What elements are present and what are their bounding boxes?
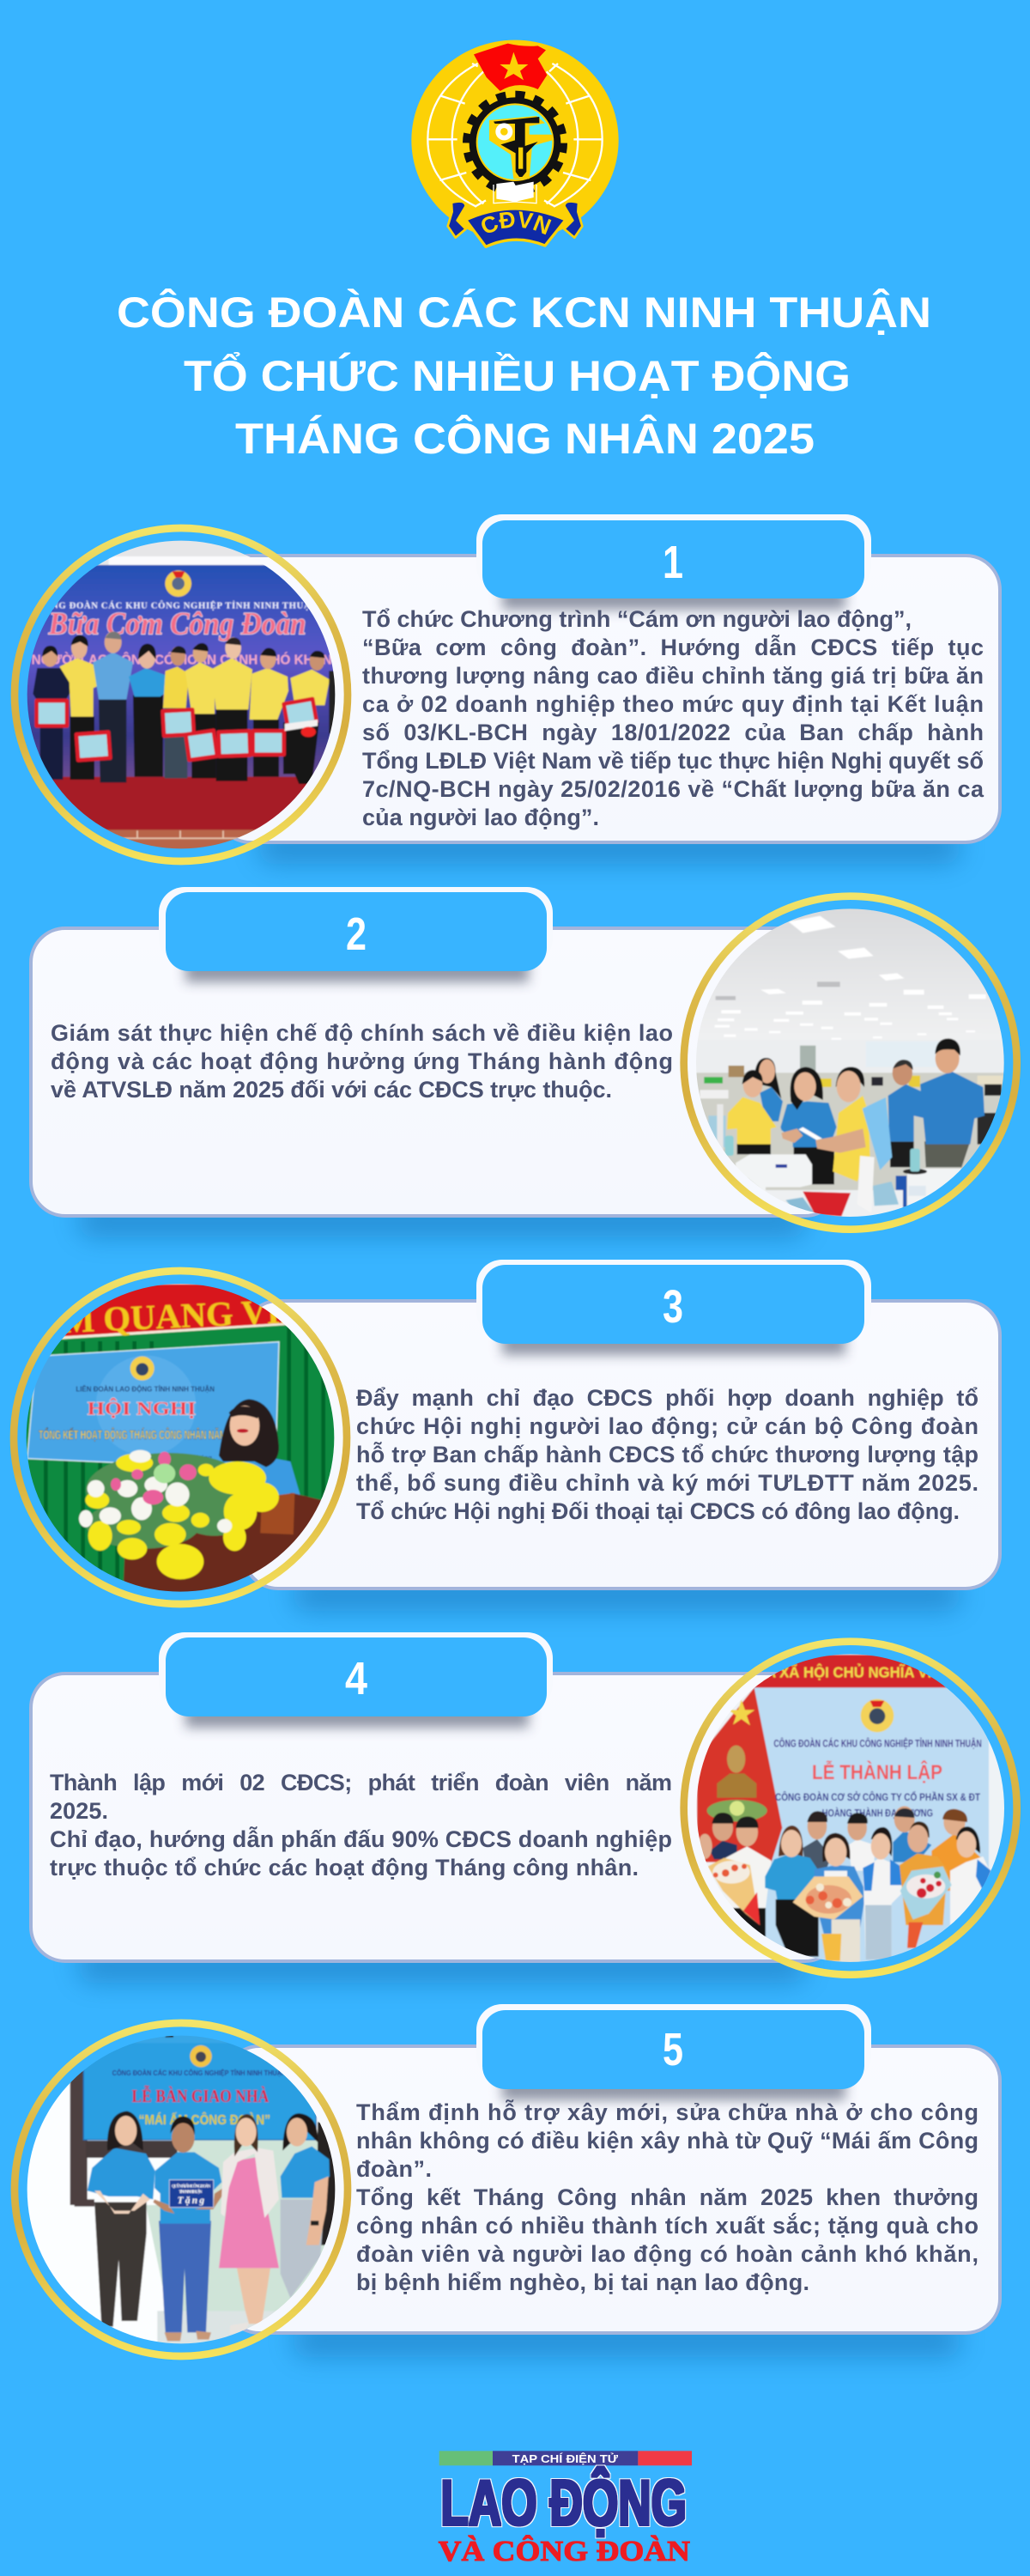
people: Tặng — [178, 2196, 204, 2206]
flowers — [79, 1450, 279, 1579]
photo 4: founding ceremony: LỄ THÀNH LẬP — [812, 1759, 942, 1784]
text block 1: “Bữa cơm công đoàn”. Hướng dẫn CĐCS tiếp tục — [362, 634, 984, 660]
people — [33, 631, 330, 784]
photo 1: workers receiving gifts: Bữa Cơm Công Đoàn — [48, 606, 306, 641]
text block 1: của người lao động”. — [362, 805, 599, 830]
text block 5: Thẩm định hỗ trợ xây mới, sửa chữa nhà ở cho công — [356, 2099, 978, 2125]
photo 2: factory visit — [684, 896, 1017, 1230]
people: TỈNH NINH THUẬN — [179, 2190, 203, 2195]
text block 5: bị bệnh hiểm nghèo, bị tai nạn lao động. — [356, 2269, 809, 2295]
background workshop colours — [700, 1066, 1003, 1147]
text block 3: chức Hội nghị người lao động; cử cán bộ Công đoàn — [356, 1413, 978, 1439]
tab 4 — [159, 1632, 553, 1728]
text block 5: công nhân có nhiều thành tích xuất sắc; tặng quà cho — [356, 2212, 978, 2239]
title — [117, 288, 931, 463]
text block 3: hỗ trợ Ban chấp hành CĐCS tổ chức thương lượng tập — [356, 1441, 978, 1467]
logo: Công đoàn Việt Nam emblem: CĐVN — [482, 211, 551, 235]
photo 4: founding ceremony: HOÀNG THÀNH ĐẠI DƯƠNG — [822, 1806, 933, 1819]
people — [727, 1038, 985, 1184]
photo 3: conference speaker: HỘI NGHỊ — [88, 1398, 197, 1419]
photo 4: founding ceremony: CÔNG ĐOÀN CƠ SỞ CÔNG TY CỔ PHẦN SX & ĐT — [775, 1790, 981, 1803]
text block 1: 7c/NQ-BCH ngày 25/02/2016 về “Chất lượng bữa ăn ca — [362, 776, 985, 802]
text block 4: 2025. — [50, 1798, 108, 1824]
photo 4: founding ceremony: A XÃ HỘI CHỦ NGHĨA VI — [766, 1663, 931, 1681]
section 1 — [15, 514, 1000, 864]
people — [88, 2111, 330, 2341]
text block 2: về ATVSLĐ năm 2025 đối với các CĐCS trực thuộc. — [51, 1077, 612, 1103]
panel 3 card — [244, 1301, 1000, 1589]
footer logo: Lao Động và Công Đoàn — [439, 2451, 692, 2567]
tab 5: 5 — [663, 2024, 683, 2075]
panel 4 card — [31, 1674, 839, 1961]
text block 2: động và các hoạt động hưởng ứng Tháng hành động — [51, 1048, 673, 1074]
text block 3: Đẩy mạnh chỉ đạo CĐCS phối hợp doanh nghiệp tổ — [356, 1385, 978, 1411]
masthead bar — [439, 2451, 692, 2465]
tab 4: 4 — [345, 1653, 367, 1704]
text block 4: Chỉ đạo, hướng dẫn phấn đấu 90% CĐCS doanh nghiệp — [50, 1826, 672, 1852]
people: QUỸ MÁI ẤM CÔNG ĐOÀN — [172, 2184, 211, 2189]
speaker — [209, 1399, 300, 1496]
bouquets — [708, 1858, 952, 1961]
tab 3 — [476, 1260, 871, 1355]
title: CÔNG ĐOÀN CÁC KCN NINH THUẬN — [117, 288, 931, 337]
title: TỔ CHỨC NHIỀU HOẠT ĐỘNG — [184, 351, 851, 400]
logo: Công đoàn Việt Nam emblem — [411, 39, 619, 248]
photo 3: conference speaker: TỔNG KẾT HOẠT ĐỘNG THÁNG CÔNG NHÂN NĂM — [39, 1427, 226, 1443]
text block 1 — [362, 606, 985, 830]
panel 1 card — [216, 556, 1000, 842]
tab 1: 1 — [663, 537, 683, 588]
photo 1: workers receiving gifts: NGƯỜI LAO ĐỘNG CÓ HOÀN CẢNH KHÓ KHĂN — [32, 652, 332, 668]
tab 5 — [476, 2004, 871, 2100]
section 2 — [31, 887, 1017, 1237]
photo 3: conference speaker — [10, 1271, 347, 1604]
masthead subtitle: VÀ CÔNG ĐOÀN — [439, 2535, 690, 2567]
photo 1: workers receiving gifts — [15, 528, 348, 861]
text block 3: Tổ chức Hội nghị Đối thoại tại CĐCS có đông lao động. — [356, 1498, 960, 1524]
tab 3: 3 — [663, 1281, 683, 1333]
title: THÁNG CÔNG NHÂN 2025 — [235, 414, 815, 463]
section 4 — [31, 1632, 1017, 1983]
photo 5: house handover: LỄ BÀN GIAO NHÀ — [131, 2085, 269, 2106]
tab 1 — [476, 514, 871, 610]
panel 5 card — [225, 2046, 1000, 2333]
masthead name: LAO ĐỘNG — [440, 2466, 687, 2538]
text block 1: ca ở 02 doanh nghiệp theo mức quy định tại Kết luận — [362, 691, 984, 717]
photo 3: conference speaker: LIÊN ĐOÀN LAO ĐỘNG TỈNH NINH THUẬN — [76, 1385, 215, 1393]
photo 3: conference speaker: Ninh Thuận, ngày 31 tháng — [129, 1453, 212, 1461]
photo 4: founding ceremony — [684, 1642, 1017, 1975]
machines — [717, 1104, 961, 1222]
text block 4: trực thuộc tổ chức các hoạt động Tháng công nhân. — [50, 1855, 639, 1880]
text block 1: thương lượng nâng cao điều chỉnh tăng giá trị bữa ăn — [362, 663, 984, 689]
panel 2 card — [31, 928, 839, 1216]
text block 5 — [356, 2099, 978, 2295]
masthead bar: TẠP CHÍ ĐIỆN TỬ — [512, 2452, 619, 2465]
bust — [707, 1746, 767, 1821]
people — [698, 1806, 991, 1962]
photo 1: workers receiving gifts: NG ĐOÀN CÁC KHU CÔNG NGHIỆP TỈNH NINH THUẬ — [52, 600, 311, 611]
text block 1: số 03/KL-BCH ngày 18/01/2022 của Ban chấp hành — [362, 720, 984, 745]
photo 5: house handover: CÔNG ĐOÀN CÁC KHU CÔNG NGHIỆP TỈNH NINH THUẬN — [112, 2068, 286, 2077]
text block 3: thể, bổ sung điều chỉnh và ký mới TƯLĐTT năm 2025. — [356, 1470, 978, 1496]
text block 4: Thành lập mới 02 CĐCS; phát triển đoàn viên năm — [50, 1770, 672, 1795]
text block 5: đoàn viên và người lao động có hoàn cảnh khó khăn, — [356, 2241, 978, 2267]
section 5 — [15, 2004, 1000, 2357]
text block 5: đoàn”. — [356, 2156, 432, 2182]
text block 1: Tổng LĐLĐ Việt Nam về tiếp tục thực hiện Nghị quyết số — [362, 748, 984, 774]
photo 3: conference speaker: NAM QUANG VINH — [10, 1290, 333, 1343]
text block 1: Tổ chức Chương trình “Cám ơn người lao động”, — [362, 606, 912, 632]
tab 2 — [159, 887, 553, 982]
photo 5: house handover — [15, 2023, 348, 2356]
text block 5: Tổng kết Tháng Công nhân năm 2025 khen thưởng — [356, 2184, 978, 2210]
text block 3 — [356, 1385, 978, 1524]
text block 2: Giám sát thực hiện chế độ chính sách về điều kiện lao — [51, 1020, 673, 1046]
podium — [122, 1492, 321, 1592]
photo 5: house handover: “MÁI ẤM CÔNG ĐOÀN” — [139, 2112, 270, 2128]
text block 4 — [50, 1770, 672, 1880]
tab 2: 2 — [346, 908, 367, 960]
section 3 — [10, 1260, 1000, 1611]
gift bags — [37, 699, 317, 760]
text block 2 — [51, 1020, 673, 1103]
text block 5: nhân không có điều kiện xây nhà từ Quỹ “Mái ấm Công — [356, 2128, 978, 2154]
